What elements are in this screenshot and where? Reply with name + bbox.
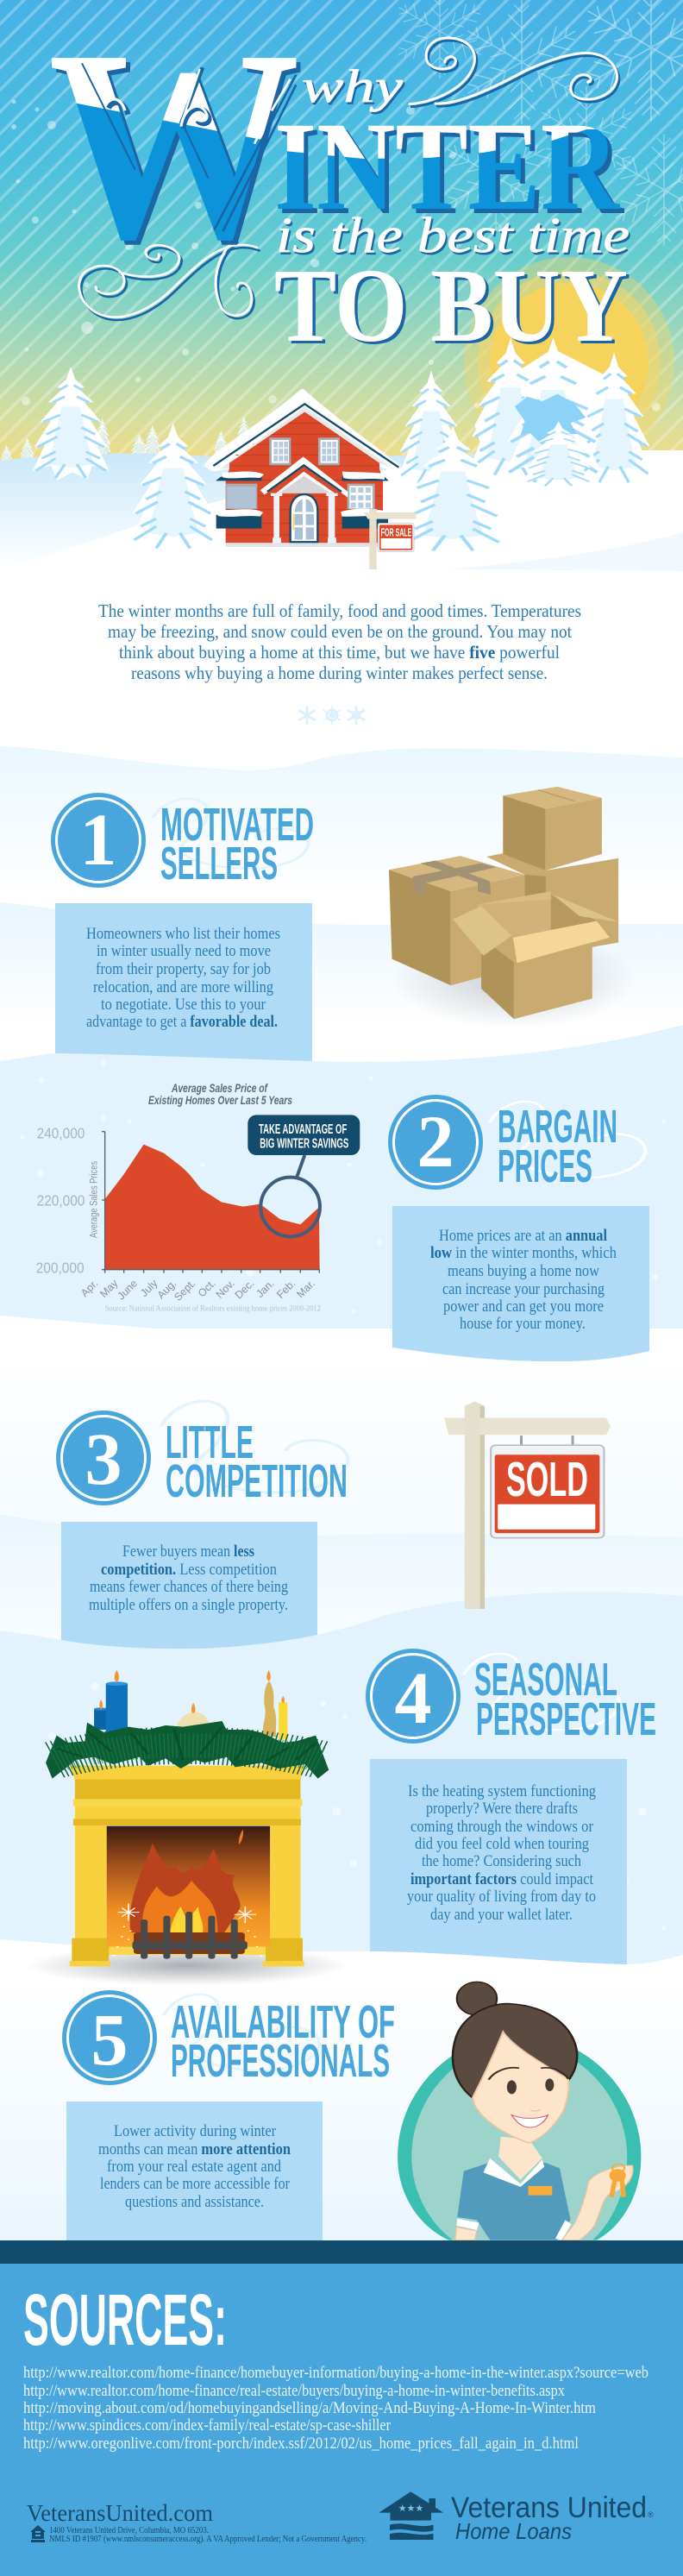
pine tree cluster <box>33 337 651 553</box>
number badge 2: 2 <box>417 1100 454 1183</box>
intro text: reasons why buying a home during winter makes perfect sense. <box>131 663 548 683</box>
chart title: Average Sales Price of <box>171 1082 268 1095</box>
website and address <box>27 2500 367 2544</box>
panel: 5 availability of professionals <box>62 1982 641 2240</box>
word: INTER: INTER <box>274 96 621 236</box>
plot: Sept. <box>172 1278 197 1304</box>
average sales price area chart <box>36 1082 360 1313</box>
logo: veterans united home loans: ® <box>648 2510 654 2519</box>
plot: June <box>115 1277 140 1302</box>
illustration: fireplace with candles and garland <box>26 1670 348 1986</box>
plot <box>36 1115 360 1313</box>
text box: advantage to get a favorable deal. <box>86 1013 278 1031</box>
falling snow <box>11 100 661 412</box>
logo: veterans united home loans: Home Loans <box>455 2518 572 2544</box>
W inline details <box>82 62 296 231</box>
source links: http://www.spindices.com/index-family/real-estate/sp-case-shiller <box>23 2416 392 2435</box>
number badge 3: 3 <box>85 1417 122 1500</box>
text box: in winter usually need to move <box>97 942 271 960</box>
text box: Home prices are at an annual <box>439 1227 607 1245</box>
illustration: sold sign: SOLD <box>506 1452 588 1507</box>
mantel <box>70 1766 305 1966</box>
panel: 4 seasonal perspective <box>26 1649 656 1986</box>
title: why winter is the best time to buy <box>48 0 630 364</box>
text box: lenders can be more accessible for <box>100 2175 291 2193</box>
text box: months can mean more attention <box>98 2140 291 2158</box>
heading <box>171 1996 395 2087</box>
panel: 3 little competition <box>56 1401 611 1649</box>
text box: Is the heating system functioning <box>408 1782 596 1800</box>
number badge 1: 1 <box>79 798 117 881</box>
plot: Jan. <box>254 1278 277 1300</box>
plot: July <box>138 1277 160 1299</box>
word: why: why <box>302 60 403 112</box>
source links: http://www.realtor.com/home-finance/real-estate/buyers/buying-a-home-in-winter-benefits.aspx <box>23 2382 565 2400</box>
fire <box>107 1826 270 1959</box>
text box <box>66 2102 323 2240</box>
dark footer band <box>0 2240 683 2264</box>
heading: PROFESSIONALS <box>171 2035 390 2087</box>
decorative swirl <box>161 1401 348 1492</box>
number badge 4: 4 <box>395 1656 431 1739</box>
source links: http://moving.about.com/od/homebuyingandselling/a/Moving-And-Buying-A-Home-In-Winter.htm <box>23 2399 596 2417</box>
swirl ornaments <box>79 38 619 320</box>
plot: Source: National Association of Realtors existing home prices 2008-2012 <box>105 1304 321 1313</box>
heading <box>160 799 314 889</box>
plot: Aug. <box>155 1278 179 1301</box>
background snow waves <box>0 746 683 2240</box>
plot: Average Sales Prices <box>88 1161 100 1238</box>
source links <box>23 2364 649 2453</box>
text box: means buying a home now <box>448 1262 599 1280</box>
text box: Fewer buyers mean less <box>122 1542 254 1561</box>
text box: Lower activity during winter <box>114 2122 277 2140</box>
plot: Dec. <box>233 1278 256 1301</box>
text box: did you feel cold when touring <box>415 1835 589 1853</box>
plot: 220,000 <box>37 1192 85 1209</box>
panel: 2 bargain prices <box>36 1082 649 1361</box>
chart title: Existing Homes Over Last 5 Years <box>148 1094 292 1107</box>
text box: relocation, and are more willing <box>93 978 273 996</box>
text box: important factors could impact <box>410 1870 594 1888</box>
website and address: 1400 Veterans United Drive, Columbia, MO 65203. <box>49 2526 209 2535</box>
text box: the home? Considering such <box>422 1852 581 1870</box>
text box: can increase your purchasing <box>442 1280 605 1298</box>
plot: Oct. <box>196 1278 218 1299</box>
text box: Homeowners who list their homes <box>86 925 280 943</box>
text box <box>370 1759 627 1964</box>
candles <box>94 1670 287 1740</box>
heading: PRICES <box>498 1140 592 1192</box>
background tree line <box>0 416 253 467</box>
intro text: think about buying a home at this time, but we have five powerful <box>119 642 560 663</box>
text box: power and can get you more <box>443 1297 604 1316</box>
for sale sign: FOR SALE <box>381 526 411 539</box>
pine garland <box>46 1721 329 1779</box>
website and address: VeteransUnited.com <box>27 2500 213 2526</box>
text box: competition. Less competition <box>101 1561 277 1579</box>
decorative swirl <box>164 1995 319 2070</box>
text box: multiple offers on a single property. <box>89 1596 288 1614</box>
heading: SELLERS <box>160 838 278 889</box>
snowy ground <box>0 450 683 571</box>
text box: coming through the windows or <box>410 1818 594 1836</box>
heading: COMPETITION <box>166 1455 348 1507</box>
text box: from your real estate agent and <box>107 2158 281 2176</box>
words: TO BUY: TO BUY <box>274 248 628 364</box>
text box: your quality of living from day to <box>407 1888 596 1906</box>
text box <box>61 1522 317 1649</box>
number badge 5: 5 <box>91 1998 128 2081</box>
large W: W <box>48 0 300 296</box>
text box <box>392 1206 649 1361</box>
heading: AVAILABILITY OF <box>171 1996 395 2048</box>
plot: Apr. <box>78 1278 100 1299</box>
callout: big winter savings <box>248 1115 360 1236</box>
decorative swirl <box>490 1102 645 1178</box>
section snow dots <box>21 1060 667 1931</box>
heading <box>474 1654 656 1745</box>
wordmark: Veterans United <box>451 2491 647 2524</box>
intro text <box>98 600 581 683</box>
text box <box>55 903 312 1061</box>
number badge 3 <box>56 1411 151 1505</box>
panel: 1 motivated sellers <box>51 787 636 1061</box>
number badge 4 <box>366 1649 461 1744</box>
icon: three small snowflakes <box>298 706 365 725</box>
text box: properly? Were there drafts <box>426 1800 578 1818</box>
plot: Nov. <box>214 1278 237 1301</box>
winter sky with diagonal stripes <box>0 0 683 552</box>
text box: low in the winter months, which <box>430 1244 617 1262</box>
sun <box>464 257 674 468</box>
intro text: The winter months are full of family, food and good times. Temperatures <box>98 600 581 621</box>
illustration: cardboard boxes <box>389 787 636 1028</box>
text box: day and your wallet later. <box>430 1906 573 1924</box>
chart title <box>148 1082 292 1107</box>
heading: MOTIVATED <box>160 799 314 851</box>
decorative snowflakes <box>393 0 683 246</box>
words: is the best time: is the best time <box>276 207 630 263</box>
heading <box>498 1101 617 1192</box>
number badge 5 <box>62 1990 157 2085</box>
callout: big winter savings: TAKE ADVANTAGE OF <box>259 1122 347 1137</box>
text box: to negotiate. Use this to your <box>101 996 266 1014</box>
icon: house with stars and waves <box>379 2491 443 2540</box>
text box: questions and assistance. <box>125 2193 264 2211</box>
number badge 1 <box>51 793 146 888</box>
intro text: may be freezing, and snow could even be on the ground. You may not <box>108 621 572 642</box>
plot: Feb. <box>274 1278 298 1301</box>
icon: equal housing <box>30 2525 46 2542</box>
text box: from their property, say for job <box>96 960 271 978</box>
logo: veterans united home loans <box>379 2491 654 2544</box>
heading: LITTLE <box>166 1417 254 1468</box>
text box: means fewer chances of there being <box>90 1578 288 1596</box>
for sale sign <box>364 509 416 569</box>
decorative swirl <box>153 799 308 869</box>
header scene <box>0 0 683 571</box>
decorative swirl <box>464 1654 619 1730</box>
plot: Mar. <box>294 1278 317 1300</box>
plot: 240,000 <box>37 1124 85 1141</box>
source links: http://www.oregonlive.com/front-porch/index.ssf/2012/02/us_home_prices_fall_again_in_d.html <box>23 2435 579 2453</box>
panel: sources <box>0 2264 683 2576</box>
callout: big winter savings: BIG WINTER SAVINGS <box>260 1137 348 1152</box>
number badge 2 <box>388 1095 483 1190</box>
plot: May <box>97 1277 121 1300</box>
website and address: NMLS ID #1907 (www.nmlsconsumeraccess.org). A VA Approved Lender; Not a Government Agency. <box>49 2535 367 2544</box>
text box: house for your money. <box>460 1315 586 1333</box>
heading <box>166 1417 348 1507</box>
illustration: agent holding keys <box>398 1982 641 2240</box>
plot: 200,000 <box>36 1260 85 1277</box>
icon: house with stars and waves: ★★★ <box>398 2503 423 2514</box>
illustration: sold sign <box>444 1402 611 1609</box>
house with snowy roof <box>204 389 401 547</box>
heading: sources: SOURCES: <box>23 2279 227 2360</box>
